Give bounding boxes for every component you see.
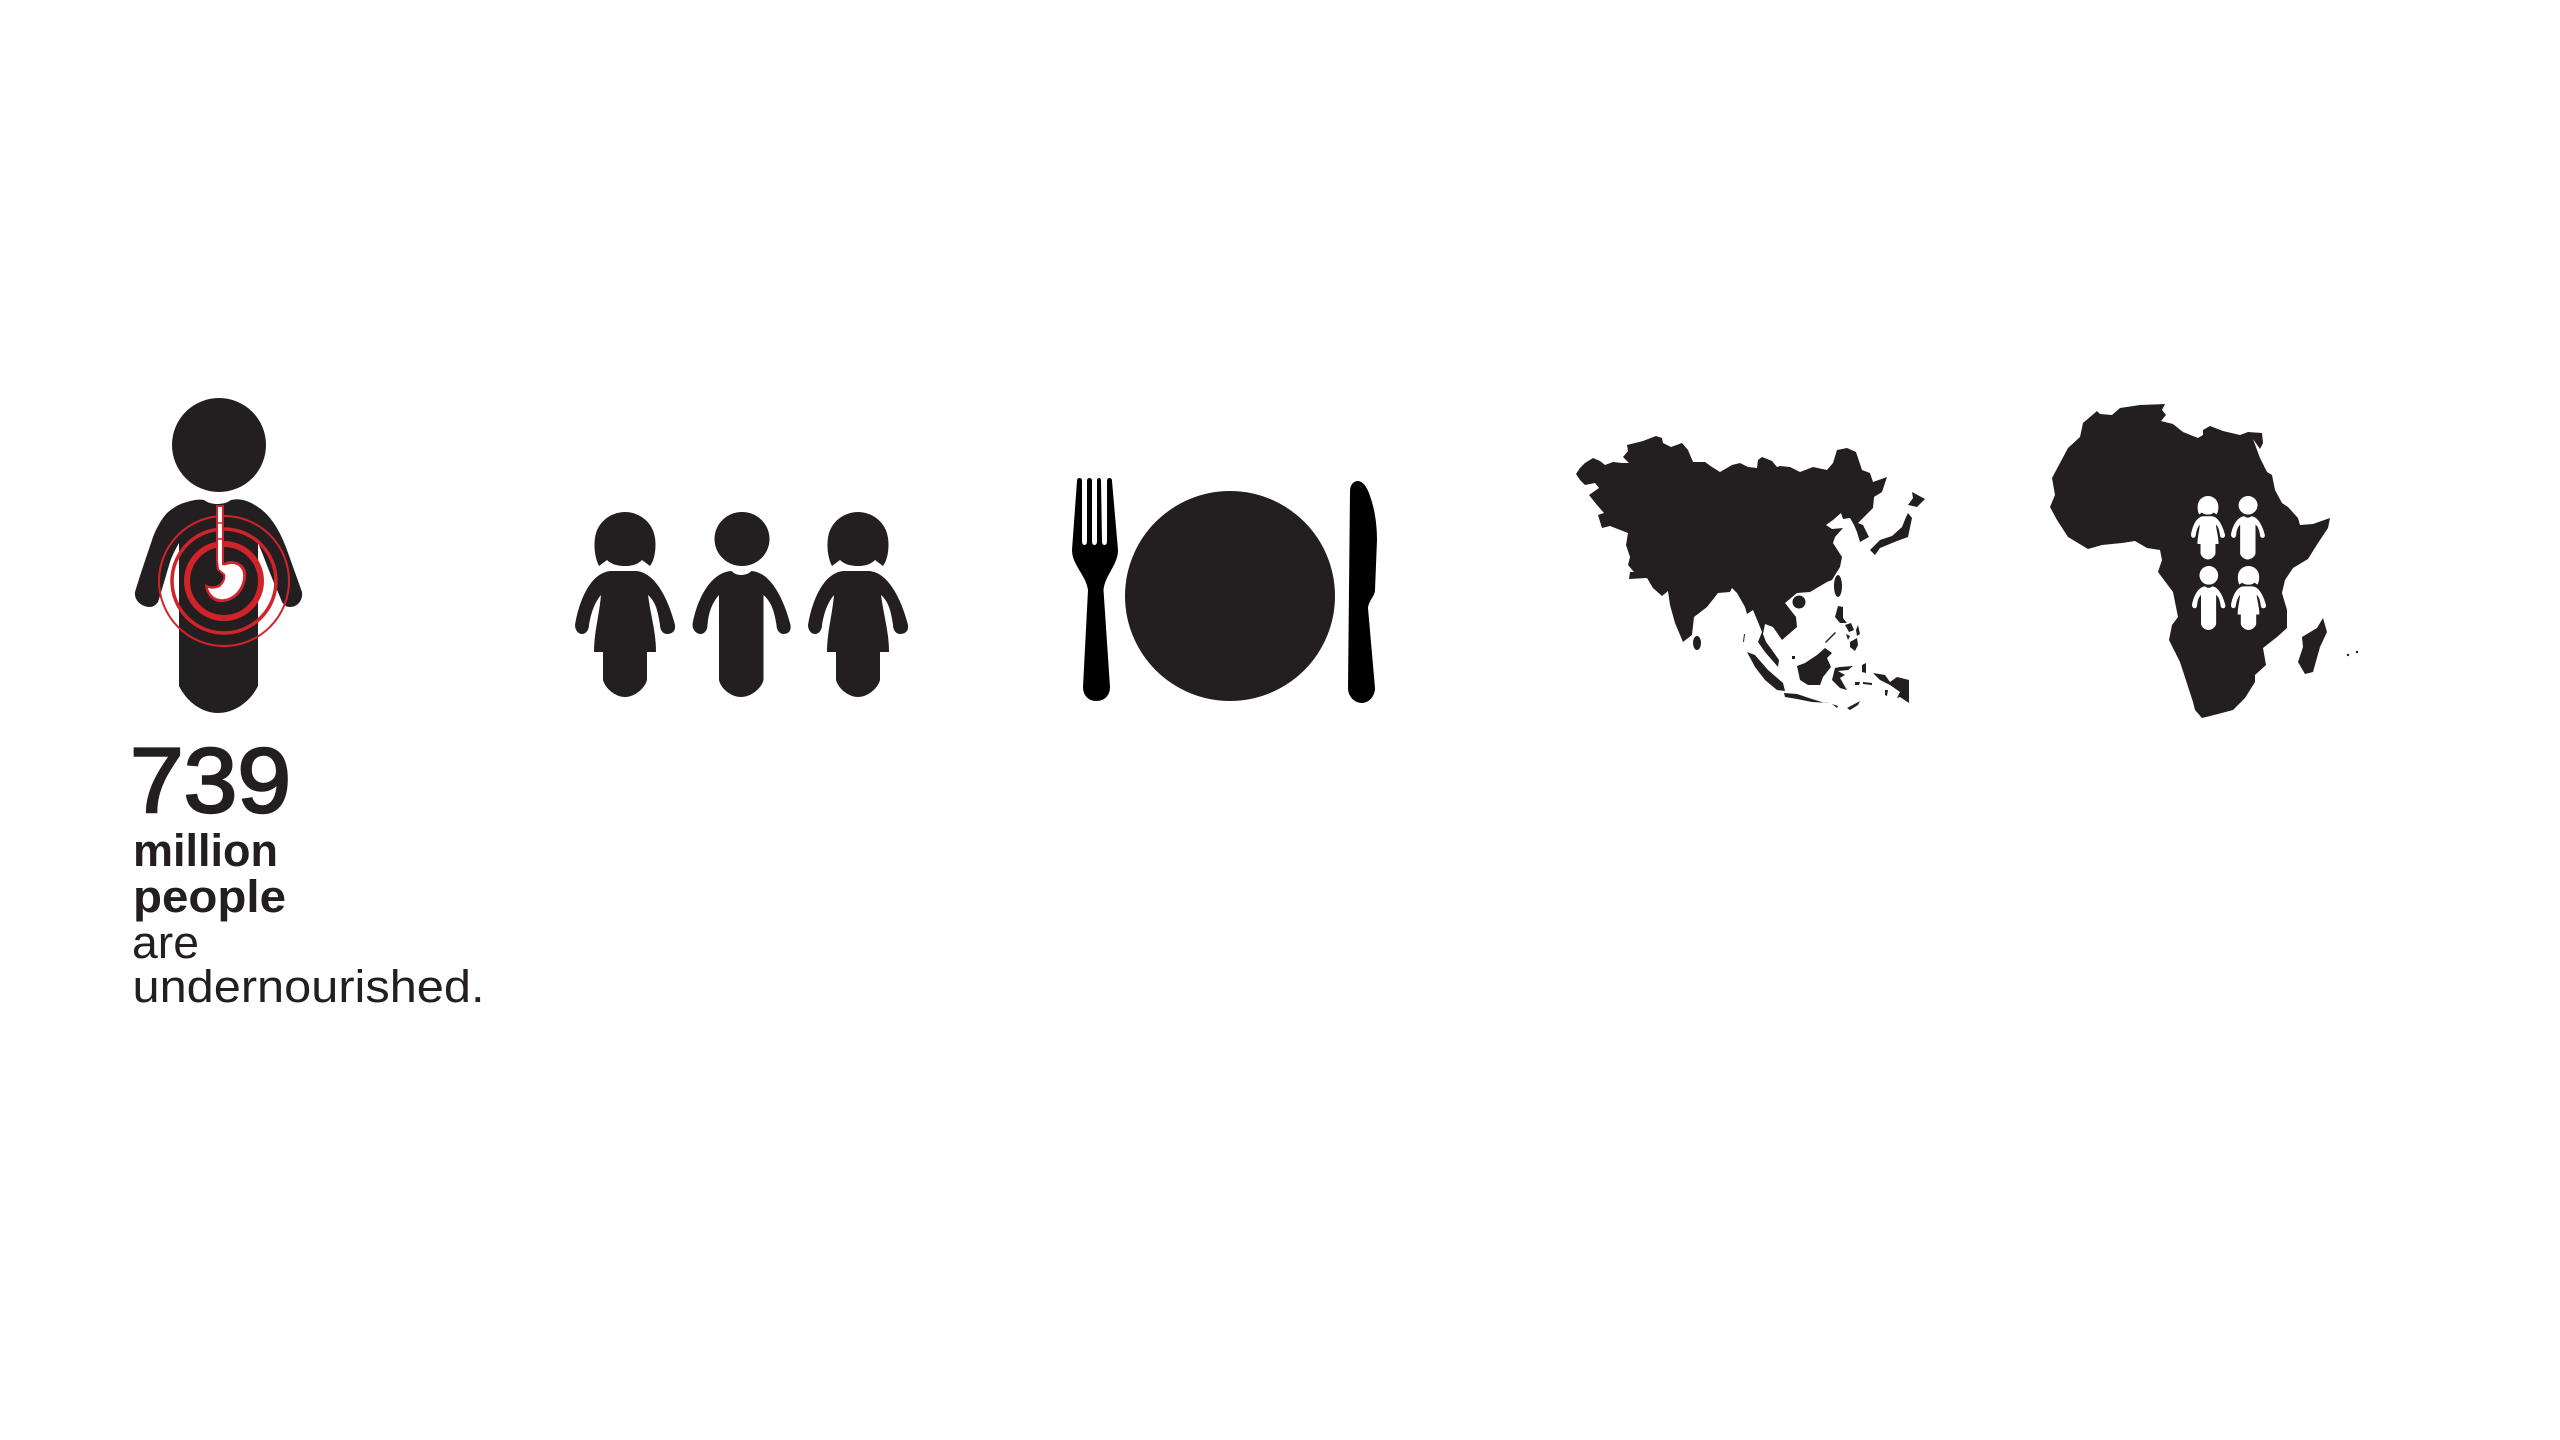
Madagascar bbox=[2298, 618, 2327, 674]
South-East Asian islands bbox=[1743, 606, 1909, 710]
are undernourished bbox=[132, 917, 484, 1012]
icon: woman bbox=[575, 512, 675, 697]
pain rings bbox=[159, 516, 289, 646]
knife bbox=[1348, 481, 1377, 703]
icon: woman bbox=[808, 512, 908, 697]
Japan bbox=[1870, 492, 1925, 555]
African continent bbox=[2050, 404, 2330, 718]
million people bbox=[133, 825, 286, 922]
are undernourished: undernourished. bbox=[132, 961, 484, 1012]
are undernourished: are bbox=[132, 917, 199, 968]
fork bbox=[1072, 478, 1118, 701]
million people: people bbox=[133, 871, 286, 922]
mainland Asia bbox=[1576, 436, 1887, 667]
figure: undernourished person with stomach bbox=[135, 398, 302, 713]
icon: man bbox=[692, 512, 791, 697]
group of three people bbox=[575, 512, 908, 697]
stomach icon bbox=[205, 505, 246, 602]
number 739: 739 bbox=[130, 730, 291, 832]
plate bbox=[1125, 491, 1335, 701]
person silhouette bbox=[135, 398, 302, 713]
map: Asia bbox=[1576, 436, 1925, 710]
icon: plate with fork and knife bbox=[1072, 478, 1377, 703]
statistic text bbox=[130, 730, 484, 1012]
small islands bbox=[2347, 651, 2358, 656]
four white people icons bbox=[2191, 496, 2266, 630]
million people: million bbox=[133, 825, 278, 876]
map: Africa with four people bbox=[2050, 404, 2358, 718]
